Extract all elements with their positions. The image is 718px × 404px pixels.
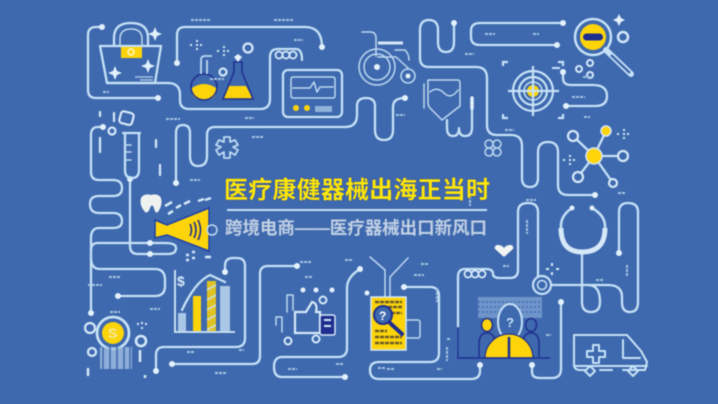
icon: stethoscope: [561, 206, 605, 252]
bar chart: [175, 270, 235, 332]
icon: chest piece circle: [533, 263, 559, 294]
icon: antenna: [370, 257, 408, 297]
icon: infusion bag: [424, 80, 472, 120]
icon: ambulance: [574, 335, 647, 376]
icon: clover and snowflake: [216, 137, 501, 158]
icon: document with magnifier: ?: [379, 309, 386, 323]
icon: people group: [457, 297, 550, 358]
icon: patient monitor: [283, 70, 342, 117]
icon: tooth: [140, 194, 162, 212]
icon: shopping bag: [100, 23, 162, 83]
icon: coin and circuit: S: [108, 325, 117, 341]
icon: wheelchair: [359, 32, 415, 85]
subtitle: 跨境电商——医疗器械出口新风口: [225, 218, 487, 238]
divider: [227, 209, 487, 211]
icon: molecule network: [563, 126, 629, 187]
icon: test tube: [100, 111, 160, 178]
icon: thumbs up with phone: [276, 288, 335, 344]
icon: document with magnifier: [371, 297, 420, 350]
connector lines: [88, 20, 638, 379]
small label marks: [88, 20, 627, 373]
icon: magnifier: [575, 14, 631, 78]
bar chart: $: [177, 273, 185, 289]
icon: megaphone: [155, 198, 217, 260]
icon: coin and circuit: [85, 317, 147, 378]
icon: coil connectors: [276, 52, 486, 278]
icon: people group: ?: [506, 315, 514, 330]
title: 医疗康健器械出海正当时: [224, 177, 490, 204]
icon: chemistry flasks: [190, 41, 253, 100]
icon: target: [503, 62, 563, 118]
connector end dots: [88, 20, 622, 380]
icon: heart: [495, 245, 513, 257]
